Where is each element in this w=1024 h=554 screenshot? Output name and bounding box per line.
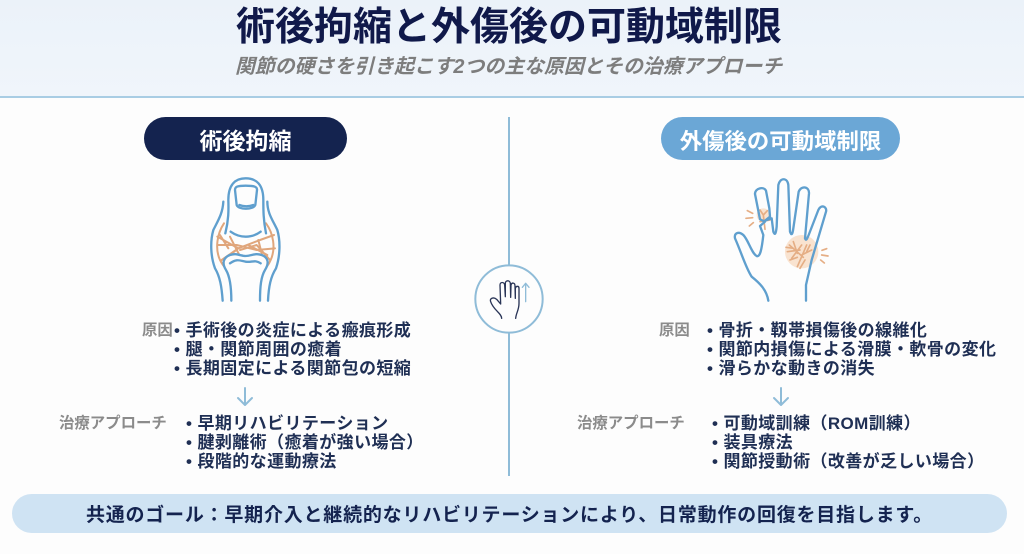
treatment list: • 可動域訓練（ROM訓練） [712, 414, 921, 433]
panel: right heading pill: 外傷後の可動域制限 [680, 129, 881, 154]
callout: common goal: 共通のゴール：早期介入と継続的なリハビリテーションにより、日常動作の回復を目指します。 [86, 505, 933, 526]
text block: right treatment [577, 414, 984, 471]
label: treatment approach: 治療アプローチ [59, 415, 167, 432]
label: treatment approach: 治療アプローチ [577, 415, 685, 432]
text block: left causes [142, 321, 411, 378]
icon: finger joint with scar tissue [210, 177, 281, 302]
cause list: • 滑らかな動きの消失 [707, 359, 875, 378]
icon: hand with upward arrow in circle [474, 264, 544, 334]
subtitle: 関節の硬さを引き起こす2つの主な原因とその治療アプローチ [235, 56, 782, 78]
panel: left heading pill [144, 117, 347, 160]
treatment list: • 段階的な運動療法 [186, 452, 337, 471]
arrow: left [237, 387, 253, 406]
title: 術後拘縮と外傷後の可動域制限 [236, 6, 782, 49]
treatment list: • 早期リハビリテーション [186, 414, 389, 433]
treatment list: • 関節授動術（改善が乏しい場合） [712, 452, 984, 471]
panel: left heading pill: 術後拘縮 [200, 128, 292, 154]
center divider [508, 117, 510, 476]
icon: injured hand [734, 178, 829, 302]
treatment list: • 腱剥離術（癒着が強い場合） [186, 433, 424, 452]
cause list [174, 321, 411, 378]
cause list [707, 321, 996, 378]
cause list: • 長期固定による関節包の短縮 [174, 359, 411, 378]
treatment list [186, 414, 424, 471]
header band [0, 0, 1024, 98]
text block: left treatment [59, 414, 424, 471]
cause list: • 手術後の炎症による瘢痕形成 [174, 321, 411, 340]
cause list: • 骨折・靱帯損傷後の線維化 [707, 321, 927, 340]
callout: common goal [12, 494, 1007, 533]
text block: right causes [659, 321, 996, 378]
cause list: • 関節内損傷による滑膜・軟骨の変化 [707, 340, 996, 359]
cause list: • 腿・関節周囲の癒着 [174, 340, 342, 359]
arrow: right [773, 387, 789, 406]
label: causes: 原因 [142, 322, 173, 339]
treatment list: • 装具療法 [712, 433, 793, 452]
label: causes: 原因 [659, 322, 690, 339]
treatment list [712, 414, 984, 471]
panel: right heading pill [661, 117, 900, 160]
